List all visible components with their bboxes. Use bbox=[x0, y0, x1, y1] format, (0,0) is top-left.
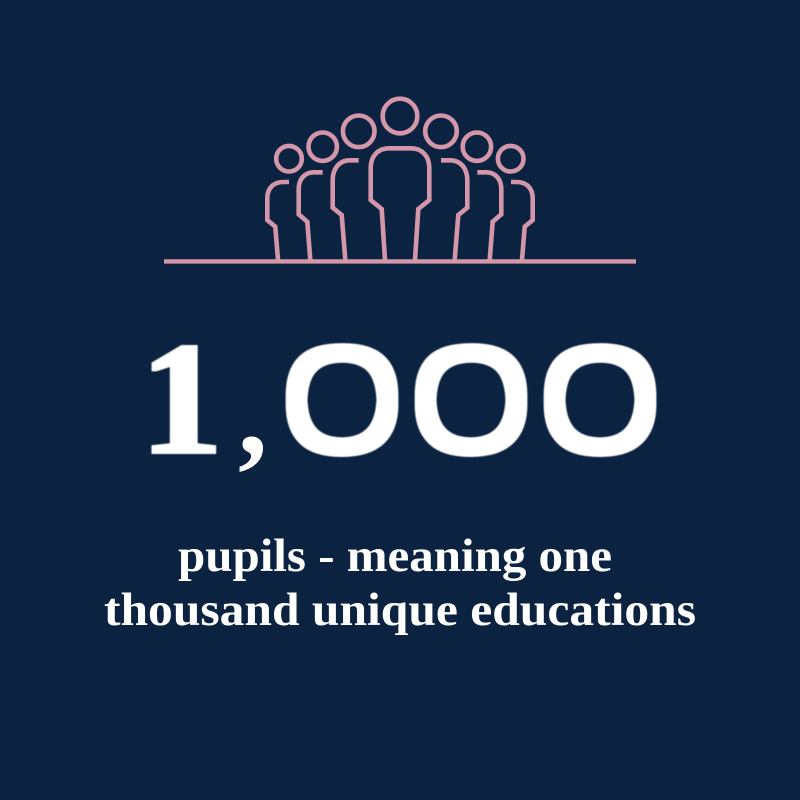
big number: , bbox=[238, 349, 268, 480]
caption: thousand unique educations bbox=[104, 584, 696, 636]
big number: 1 bbox=[141, 310, 222, 489]
person: far left bbox=[267, 146, 302, 260]
person: centre bbox=[371, 99, 429, 260]
person: second right bbox=[463, 132, 501, 260]
person: third right bbox=[425, 116, 467, 260]
big number: 0 bbox=[406, 318, 536, 483]
caption bbox=[104, 530, 696, 636]
person: third left bbox=[333, 116, 375, 260]
person: second left bbox=[299, 132, 337, 260]
person: far right bbox=[498, 146, 533, 260]
caption: pupils - meaning one bbox=[178, 530, 612, 582]
big number: 0 bbox=[535, 318, 665, 483]
big number bbox=[141, 310, 665, 489]
big number: 0 bbox=[277, 318, 407, 483]
ground line bbox=[164, 259, 636, 264]
icon: group of seven people standing on a line bbox=[164, 99, 636, 261]
